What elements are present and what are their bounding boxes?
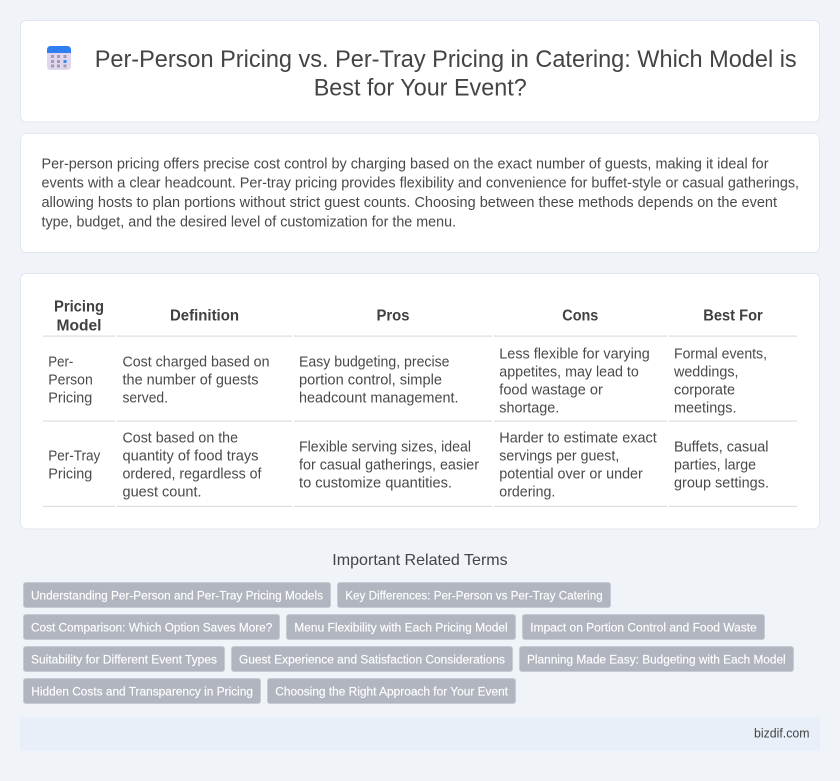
table row: per-tray pricing	[48, 431, 769, 501]
table row: per-person pricing: served.	[122, 391, 168, 407]
tag: key differences: Key Differences: Per-Person vs Per-Tray Catering	[345, 588, 603, 602]
title: Per-Person Pricing vs. Per-Tray Pricing in Catering: Which Model is	[95, 46, 797, 73]
table header row: Best For	[703, 308, 763, 324]
text block: intro paragraph: Per-person pricing offers precise cost control by charging based on the exact number of guests, making it ideal for	[42, 156, 769, 172]
tag: menu flexibility	[286, 614, 516, 640]
tag: portion control: Impact on Portion Control and Food Waste	[530, 620, 757, 634]
table row: per-tray pricing: potential over or under	[499, 467, 643, 483]
footer bar	[20, 717, 820, 751]
text block: intro paragraph	[42, 156, 799, 230]
tag: understanding pricing models	[24, 582, 330, 608]
table row: per-person pricing: Per-	[48, 355, 73, 371]
panel: related term tags	[24, 582, 794, 704]
text block: intro paragraph: events with a clear headcount. Per-tray pricing provides flexibility and convenience for buffet-style or casual gatherings,	[42, 176, 799, 192]
table row: per-tray pricing: servings per guest,	[499, 449, 619, 465]
tag: choosing the right approach	[268, 678, 516, 704]
table row: per-tray pricing: Cost based on the	[122, 431, 238, 447]
tag: cost comparison: Cost Comparison: Which Option Saves More?	[31, 620, 273, 634]
table header row: Pricing	[54, 299, 104, 316]
table row: per-person pricing: Person	[48, 373, 93, 389]
tag: hidden costs: Hidden Costs and Transparency in Pricing	[31, 684, 253, 698]
table row: per-person pricing: Easy budgeting, precise	[299, 355, 450, 371]
table row: per-person pricing: Less flexible for varying	[499, 346, 650, 362]
table row: per-tray pricing: group settings.	[674, 476, 769, 492]
tag: planning made easy	[520, 646, 794, 672]
text block: intro paragraph: allowing hosts to plan portions without strict guest counts. Choosing between these methods depends on the event	[42, 195, 777, 211]
table row: per-tray pricing: parties, large	[674, 458, 756, 474]
table row: per-tray pricing: Buffets, casual	[674, 440, 768, 456]
table row: per-tray pricing: to customize quantities.	[299, 476, 452, 492]
table row: per-person pricing: Formal events,	[674, 346, 767, 362]
table row: per-tray pricing: guest count.	[122, 485, 202, 501]
table row: per-person pricing: Pricing	[48, 391, 92, 407]
panel: header card	[20, 20, 820, 122]
tag: suitability	[24, 646, 224, 672]
tag: planning made easy: Planning Made Easy: Budgeting with Each Model	[527, 652, 786, 666]
table row: per-person pricing: food wastage or	[499, 382, 603, 398]
tag: guest experience	[232, 646, 512, 672]
tag: portion control	[522, 614, 764, 640]
footer bar: bizdif.com	[754, 727, 810, 741]
table row: per-tray pricing: ordering.	[499, 485, 555, 501]
table row: per-tray pricing: Harder to estimate exact	[499, 431, 657, 447]
table row: per-person pricing: portion control, simple	[299, 373, 442, 389]
table header row: Pros	[376, 308, 410, 324]
table row: per-person pricing: the number of guests	[122, 373, 258, 389]
table row: per-person pricing: shortage.	[499, 400, 559, 416]
panel: comparison table card	[20, 274, 820, 529]
table row: per-person pricing: meetings.	[674, 400, 736, 416]
table row: per-tray pricing: Flexible serving sizes, ideal	[299, 440, 471, 456]
table row: per-person pricing: headcount management.	[299, 391, 458, 407]
tag: suitability: Suitability for Different Event Types	[31, 652, 217, 666]
title: Best for Your Event?	[314, 74, 527, 102]
table row: per-tray pricing: Pricing	[48, 467, 92, 483]
table row: per-person pricing: weddings,	[673, 364, 738, 380]
tag: understanding pricing models: Understanding Per-Person and Per-Tray Pricing Models	[31, 588, 323, 602]
tag: choosing the right approach: Choosing the Right Approach for Your Event	[275, 684, 509, 698]
icon: calendar	[47, 46, 71, 70]
table header row: Model	[56, 318, 102, 334]
tag: guest experience: Guest Experience and Satisfaction Considerations	[239, 652, 505, 666]
tag: menu flexibility: Menu Flexibility with Each Pricing Model	[294, 620, 508, 634]
table row: per-tray pricing: for casual gatherings, easier	[299, 458, 479, 474]
text block: intro paragraph: type, budget, and the desired level of customization for the menu.	[42, 214, 456, 230]
table row: per-person pricing: Cost charged based on	[122, 355, 270, 371]
table row: per-person pricing	[48, 346, 767, 416]
table header row: Cons	[562, 308, 598, 324]
table row: per-person pricing: appetites, may lead to	[499, 364, 639, 380]
panel: intro paragraph card	[20, 134, 820, 252]
tag: key differences	[338, 582, 610, 608]
table row: per-tray pricing: quantity of food trays	[122, 449, 258, 465]
table header row	[54, 299, 763, 334]
tag: hidden costs	[24, 678, 260, 704]
table row: per-tray pricing: ordered, regardless of	[122, 467, 262, 483]
tag: cost comparison	[24, 614, 280, 640]
table row: per-tray pricing: Per-Tray	[48, 449, 101, 465]
heading: important related terms: Important Related Terms	[332, 552, 508, 569]
title	[95, 46, 797, 102]
table row: per-person pricing: corporate	[674, 382, 735, 398]
table header row: Definition	[170, 308, 239, 324]
